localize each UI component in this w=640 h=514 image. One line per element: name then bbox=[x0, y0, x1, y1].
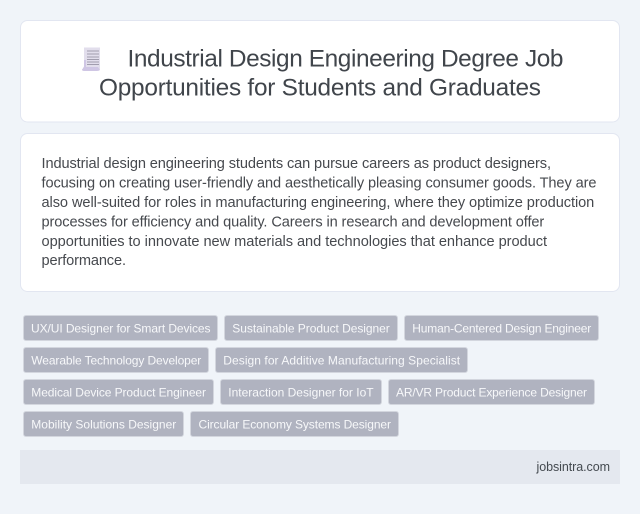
text block: description: opportunities to innovate new materials and technologies that enhance product bbox=[42, 234, 547, 250]
text block: description: also well-suited for roles in manufacturing engineering, where they optimize production bbox=[42, 195, 594, 211]
tag bbox=[190, 412, 398, 436]
tag: Sustainable Product Designer bbox=[232, 321, 390, 335]
tag: Medical Device Product Engineer bbox=[31, 385, 206, 399]
tag bbox=[24, 412, 184, 436]
panel: description card bbox=[20, 134, 620, 292]
tag: Human-Centered Design Engineer bbox=[412, 321, 591, 335]
title: Industrial Design Engineering Degree Job bbox=[128, 46, 564, 73]
text block: description: processes for efficiency and quality. Careers in research and development offer bbox=[42, 214, 544, 230]
text block: description: focusing on creating user-friendly and aesthetically pleasing consumer goods. They are bbox=[42, 176, 596, 192]
tag bbox=[388, 380, 594, 404]
footer text: site name: jobsintra.com bbox=[536, 460, 610, 474]
text block: description: performance. bbox=[42, 253, 126, 269]
tag bbox=[24, 380, 214, 404]
panel: title card bbox=[20, 20, 620, 122]
text block: description: Industrial design engineering students can pursue careers as product designers, bbox=[42, 156, 551, 172]
text block: description bbox=[42, 156, 596, 269]
icon: paper document bbox=[82, 48, 100, 71]
tag bbox=[24, 348, 208, 372]
tag bbox=[24, 316, 218, 340]
tag: Interaction Designer for IoT bbox=[228, 385, 374, 399]
title bbox=[99, 46, 564, 102]
tag bbox=[404, 316, 598, 340]
footer bar bbox=[20, 450, 620, 484]
title: Opportunities for Students and Graduates bbox=[99, 75, 541, 102]
tag: UX/UI Designer for Smart Devices bbox=[31, 321, 210, 335]
tag: Circular Economy Systems Designer bbox=[198, 417, 391, 431]
tag bbox=[216, 348, 468, 372]
tag bbox=[220, 380, 382, 404]
tag bbox=[224, 316, 398, 340]
tag: Wearable Technology Developer bbox=[31, 353, 201, 367]
tag: Design for Additive Manufacturing Specialist bbox=[223, 353, 461, 367]
tag group: job titles bbox=[24, 316, 598, 436]
tag: AR/VR Product Experience Designer bbox=[396, 385, 587, 399]
tag: Mobility Solutions Designer bbox=[31, 417, 176, 431]
